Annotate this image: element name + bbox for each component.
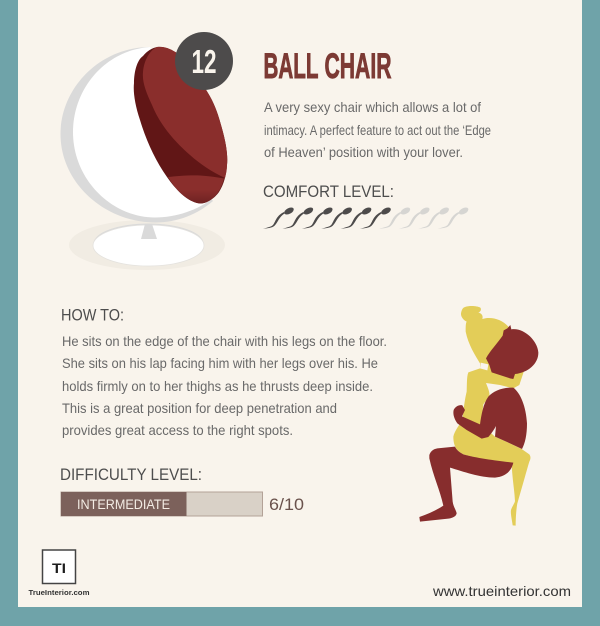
icon: ball chair: [60, 47, 227, 270]
difficulty bar: [61, 492, 262, 516]
man leg: [419, 447, 513, 522]
logo: TI: [52, 560, 66, 576]
description text: intimacy. A perfect feature to act out the ‘Edge: [264, 122, 491, 138]
difficulty heading: DIFFICULTY LEVEL:: [60, 465, 202, 484]
man torso and arm: [453, 388, 527, 449]
logo: TrueInterior.com: [28, 588, 90, 597]
woman figure: [453, 306, 530, 526]
title: BALL: [264, 47, 318, 86]
how to text: This is a great position for deep penetration and: [62, 400, 337, 416]
figure illustration: [419, 306, 538, 526]
how to heading: HOW TO:: [61, 306, 124, 324]
comfort level heading: COMFORT LEVEL:: [263, 182, 394, 201]
how to text: provides great access to the right spots.: [62, 422, 293, 438]
how to text: He sits on the edge of the chair with his legs on the floor.: [62, 333, 387, 349]
how to text: She sits on his lap facing him with her legs over his. He: [62, 355, 378, 371]
difficulty bar: INTERMEDIATE: [77, 497, 170, 512]
comfort rating icons: [263, 206, 470, 229]
description text: [264, 99, 491, 160]
number badge: [175, 32, 233, 90]
difficulty score: 6/10: [269, 495, 304, 514]
logo: [28, 550, 90, 597]
description text: A very sexy chair which allows a lot of: [264, 99, 481, 115]
how to text: holds firmly on to her thighs as he thrusts deep inside.: [62, 378, 373, 394]
number badge: 12: [192, 43, 216, 80]
website url: www.trueinterior.com: [432, 583, 571, 599]
how to text: [62, 333, 387, 438]
description text: of Heaven’ position with your lover.: [264, 144, 463, 160]
title: CHAIR: [324, 47, 392, 86]
man head: [486, 325, 538, 379]
neck gap: [480, 363, 488, 370]
